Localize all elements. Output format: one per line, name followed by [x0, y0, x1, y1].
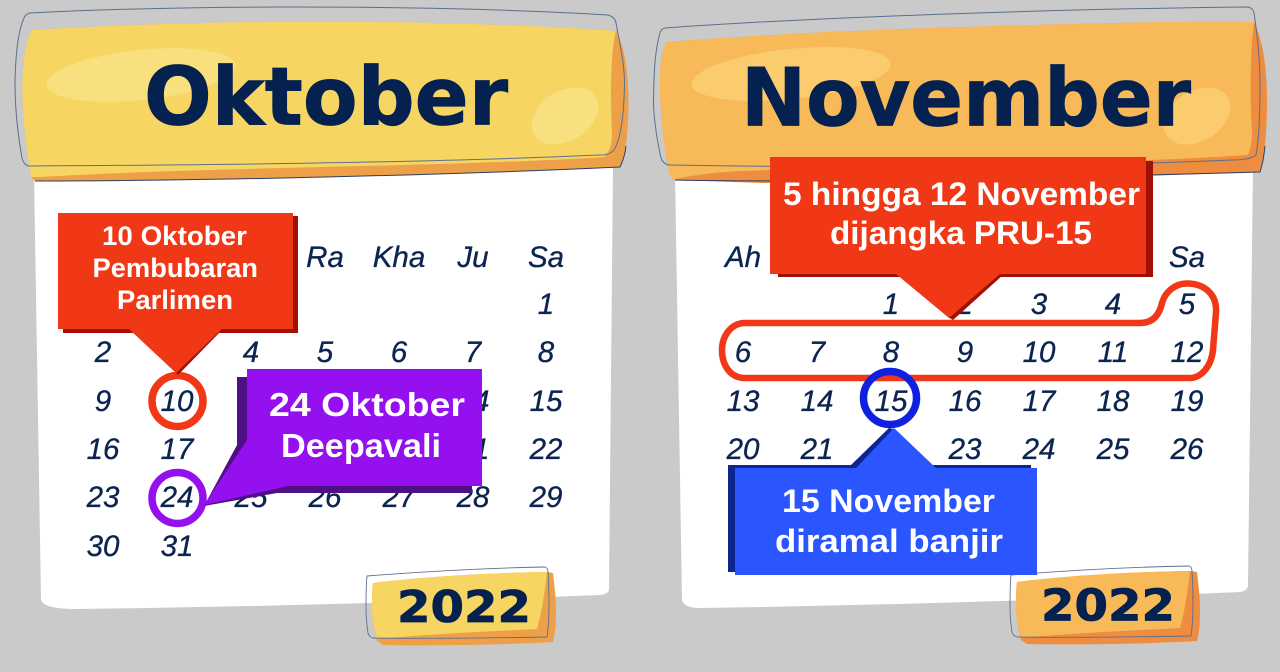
weekday and date grid: 30: [87, 530, 120, 563]
weekday and date grid: 25: [234, 481, 268, 514]
weekday and date grid: 10: [1023, 336, 1056, 369]
weekday and date grid: 20: [382, 433, 416, 466]
weekday and date grid: 3: [169, 336, 186, 369]
weekday and date grid: 1: [538, 288, 554, 321]
circle: 24 Oktober: [152, 472, 203, 524]
callout: 24 Oktober Deepavali: Deepavali: [281, 427, 441, 464]
outline: 5 to 12 November: [722, 284, 1216, 378]
weekday and date grid: Is: [166, 241, 189, 274]
weekday and date grid: 6: [735, 336, 752, 369]
weekday and date grid: 15: [530, 385, 563, 418]
weekday and date grid: 18: [1097, 385, 1130, 418]
year badge: [366, 567, 556, 645]
weekday and date grid: 24: [160, 481, 193, 514]
calendar paper: [34, 165, 613, 609]
header banner: [15, 7, 628, 181]
weekday and date grid: 12: [1171, 336, 1203, 369]
weekday and date grid: 9: [95, 385, 111, 418]
weekday and date grid: 19: [309, 433, 341, 466]
heading: November: November: [741, 52, 1192, 144]
weekday and date grid: 8: [883, 336, 900, 369]
weekday and date grid: 17: [1023, 385, 1057, 418]
weekday and date grid: 5: [1179, 288, 1196, 321]
heading: Oktober: Oktober: [144, 50, 509, 144]
callout: 15 November diramal banjir: diramal banjir: [775, 523, 1003, 559]
weekday and date grid: 23: [948, 433, 982, 466]
weekday and date grid: 17: [161, 433, 195, 466]
weekday and date grid: 21: [456, 433, 489, 466]
weekday and date grid: 6: [391, 336, 408, 369]
weekday and date grid: 3: [1031, 288, 1048, 321]
weekday and date grid: 1: [883, 288, 899, 321]
weekday and date grid: 8: [538, 336, 555, 369]
weekday and date grid: 22: [529, 433, 562, 466]
weekday and date grid: [723, 241, 1205, 466]
weekday and date grid: Ah: [83, 241, 121, 274]
header banner: [654, 7, 1267, 183]
weekday and date grid: 4: [1105, 288, 1121, 321]
weekday and date grid: 25: [1096, 433, 1130, 466]
weekday and date grid: 13: [727, 385, 760, 418]
callout: 10 Oktober Pembubaran Parlimen: Pembubaran: [92, 253, 258, 283]
year badge: 2022: [1041, 580, 1175, 632]
weekday and date grid: 12: [309, 385, 341, 418]
callout: 5 hingga 12 November dijangka PRU-15: 5 hingga 12 November: [783, 176, 1140, 212]
weekday and date grid: 26: [308, 481, 342, 514]
weekday and date grid: 7: [465, 336, 483, 369]
calendar paper: [675, 165, 1253, 608]
callout: 24 Oktober Deepavali: 24 Oktober: [269, 386, 465, 423]
callout: 10 Oktober Pembubaran Parlimen: 10 Oktober: [102, 221, 247, 251]
circle: 10 Oktober: [152, 376, 203, 426]
weekday and date grid: 16: [949, 385, 982, 418]
callout: 10 Oktober Pembubaran Parlimen: [58, 213, 298, 375]
weekday and date grid: 7: [809, 336, 827, 369]
weekday and date grid: Sa: [1169, 241, 1205, 274]
weekday and date grid: 26: [1170, 433, 1204, 466]
weekday and date grid: 16: [87, 433, 120, 466]
weekday and date grid: Se: [233, 241, 269, 274]
weekday and date grid: 19: [1171, 385, 1203, 418]
weekday and date grid: 11: [1098, 336, 1128, 369]
weekday and date grid: 9: [957, 336, 973, 369]
weekday and date grid: [83, 241, 564, 563]
year badge: 2022: [397, 582, 531, 633]
weekday and date grid: 4: [243, 336, 259, 369]
weekday and date grid: 28: [456, 481, 490, 514]
weekday and date grid: 2: [956, 288, 973, 321]
weekday and date grid: 31: [161, 530, 193, 563]
weekday and date grid: 29: [529, 481, 562, 514]
weekday and date grid: 24: [1022, 433, 1055, 466]
weekday and date grid: Ah: [723, 241, 761, 274]
weekday and date grid: 13: [383, 385, 416, 418]
weekday and date grid: 21: [800, 433, 833, 466]
callout: 15 November diramal banjir: 15 November: [782, 483, 995, 519]
weekday and date grid: Kha: [373, 241, 425, 274]
weekday and date grid: 15: [875, 385, 908, 418]
weekday and date grid: 2: [94, 336, 111, 369]
panel: November calendar: [654, 7, 1267, 644]
callout: 15 November diramal banjir: [728, 428, 1037, 575]
circle: 15 November: [864, 372, 916, 424]
weekday and date grid: 27: [382, 481, 417, 514]
callout: 5 hingga 12 November dijangka PRU-15: dijangka PRU-15: [830, 215, 1092, 251]
weekday and date grid: 20: [726, 433, 760, 466]
year badge: [1010, 566, 1200, 644]
callout: 5 hingga 12 November dijangka PRU-15: [770, 157, 1153, 320]
weekday and date grid: 14: [801, 385, 833, 418]
weekday and date grid: Ra: [306, 241, 344, 274]
weekday and date grid: Ju: [456, 241, 489, 274]
weekday and date grid: 14: [457, 385, 489, 418]
weekday and date grid: 23: [86, 481, 120, 514]
weekday and date grid: Sa: [528, 241, 564, 274]
callout: 10 Oktober Pembubaran Parlimen: Parlimen: [117, 285, 233, 315]
weekday and date grid: 5: [317, 336, 334, 369]
callout: 24 Oktober Deepavali: [204, 369, 482, 506]
weekday and date grid: 10: [161, 385, 194, 418]
panel: Oktober calendar: [15, 7, 628, 645]
